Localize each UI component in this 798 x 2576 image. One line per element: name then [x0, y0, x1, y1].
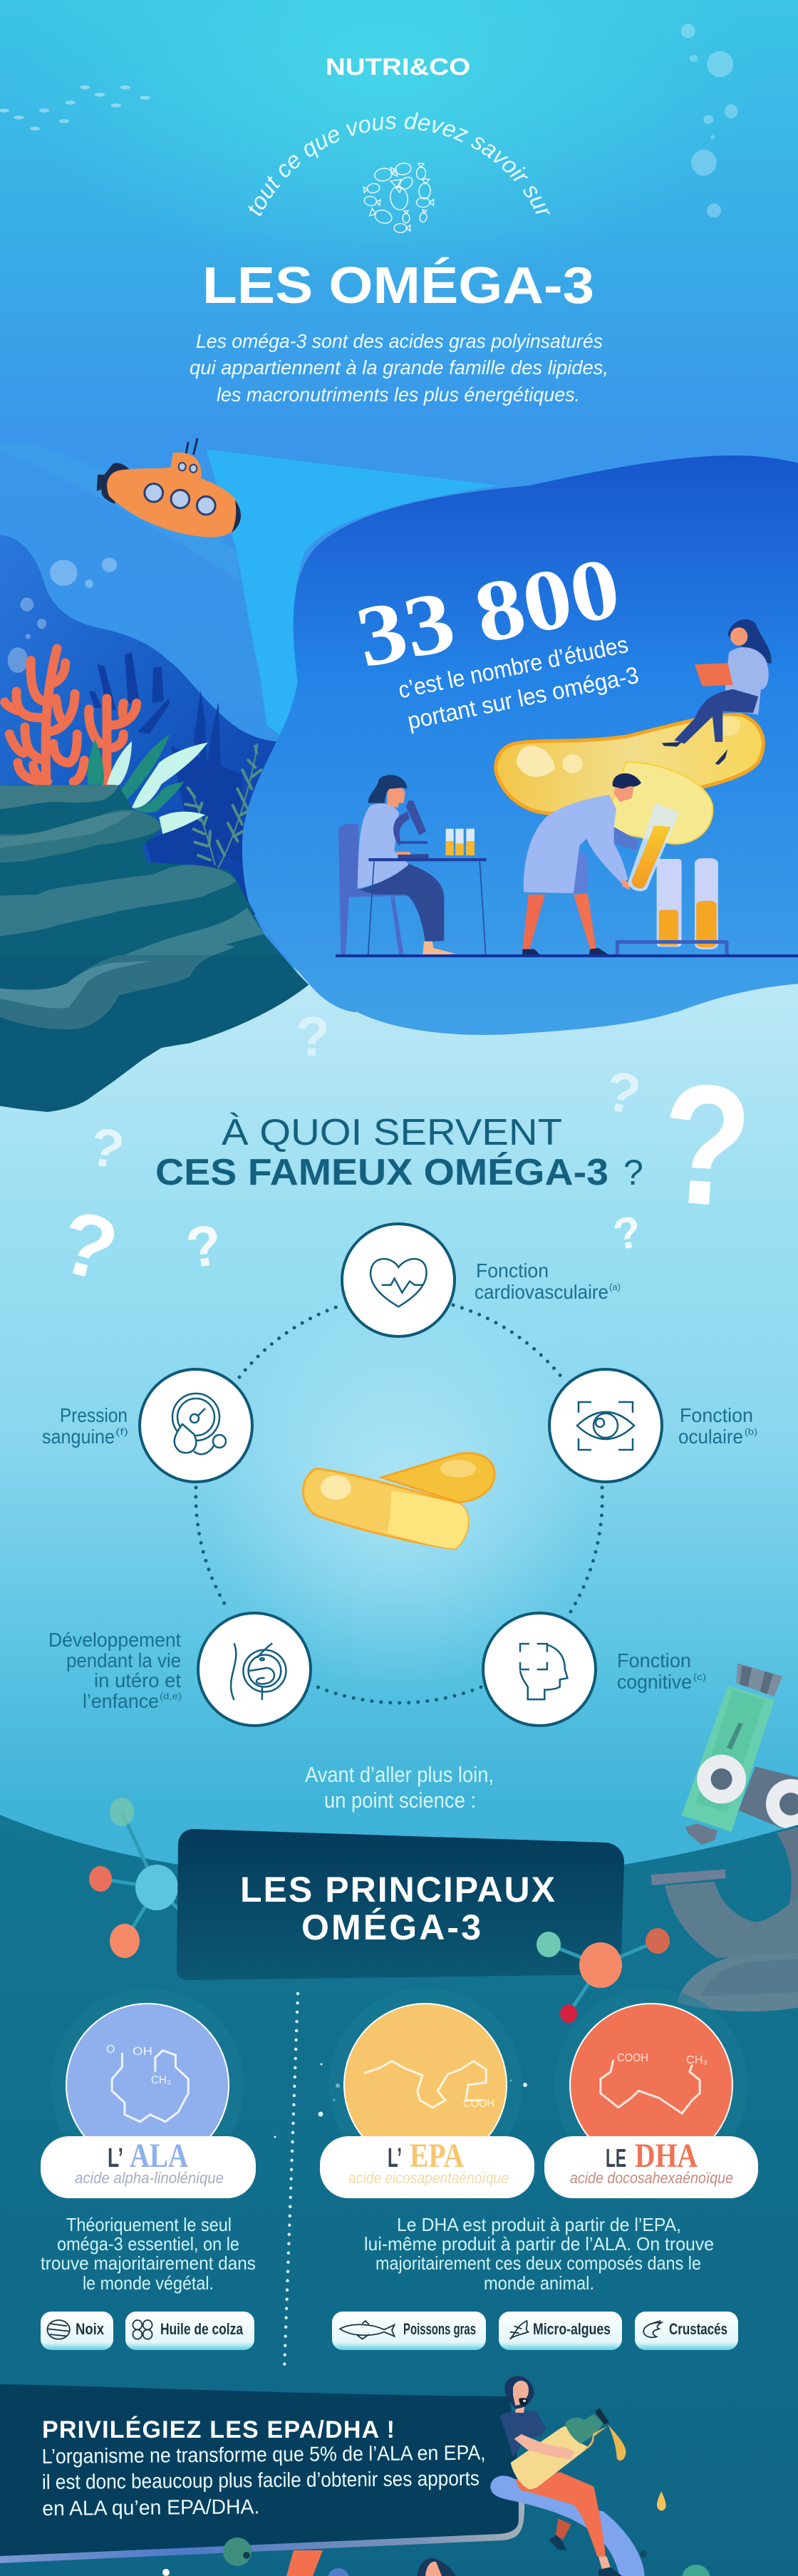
label — [617, 1649, 706, 1693]
label: (f) — [115, 1426, 128, 1437]
transition text — [305, 1762, 494, 1813]
heading: a quoi servent: À QUOI SERVENT — [222, 1112, 562, 1153]
chip: huile de colza: Huile de colza — [160, 2320, 244, 2338]
question marks: ? — [600, 1058, 646, 1127]
node: cardiovasculaire — [342, 1224, 621, 1336]
node: pression sanguine — [42, 1369, 252, 1482]
chemical structure ALA: O — [106, 2044, 115, 2056]
node: cognitive — [483, 1613, 706, 1726]
chemical structure EPA — [364, 2061, 494, 2110]
label: (b) — [745, 1426, 757, 1437]
icon: fish — [340, 2321, 395, 2339]
header light glow — [14, 0, 755, 285]
chip: micro-algues: Micro-algues — [533, 2320, 611, 2338]
chip: huile de colza — [125, 2312, 254, 2350]
icon: microscope upper — [682, 1663, 798, 1845]
pill text ALA: acide alpha-linolénique — [75, 2169, 224, 2187]
heading text — [240, 1870, 555, 1947]
pill text ALA: ALA — [130, 2137, 188, 2175]
pill text DHA: acide docosahexaénoïque — [570, 2169, 733, 2187]
text: EPA DHA description: Le DHA est produit à partir de l’EPA, — [397, 2214, 681, 2235]
pill ALA — [41, 2136, 256, 2198]
pill text DHA: LE — [606, 2143, 626, 2173]
label: sanguine — [42, 1426, 115, 1448]
bubbles — [8, 557, 117, 673]
sparkles — [274, 2063, 527, 2138]
label: Développement — [48, 1629, 181, 1651]
central capsule — [303, 1453, 494, 1549]
panel heading: PRIVILÉGIEZ LES EPA/DHA ! — [42, 2416, 395, 2443]
question marks: ? — [84, 1116, 129, 1182]
chemical structure DHA: COOH — [617, 2052, 648, 2064]
scientist on capsule — [662, 619, 772, 765]
pill DHA — [544, 2136, 758, 2198]
left molecule — [89, 1798, 196, 1958]
chip: noix — [41, 2312, 113, 2350]
intro paragraph — [190, 330, 608, 406]
label — [678, 1404, 757, 1448]
light band upper left — [0, 442, 239, 580]
rocks — [0, 785, 306, 984]
icon: colza flower — [133, 2320, 152, 2339]
lower rocks — [0, 955, 309, 1112]
person with oil bottle — [490, 2376, 645, 2576]
pill text ALA — [75, 2137, 224, 2187]
question marks — [49, 1005, 757, 1301]
intro paragraph: qui appartiennent à la grande famille des lipides, — [190, 356, 608, 378]
blob bottom — [356, 1011, 677, 1035]
stat: 33 800: 33 800 — [348, 539, 628, 686]
icon: pregnancy — [231, 1643, 286, 1700]
label: in utéro et — [94, 1669, 181, 1691]
label: (a) — [609, 1282, 621, 1292]
dark section dome — [0, 1815, 798, 2576]
node: developpement — [48, 1613, 311, 1726]
icon: submarine — [97, 438, 241, 537]
arc heading: tout ce que vous devez savoir sur — [248, 113, 550, 216]
scientist with test tube — [522, 773, 682, 955]
centre glow — [207, 1304, 591, 1689]
question marks: ? — [296, 1005, 330, 1068]
coral — [5, 649, 137, 783]
chemical structure ALA — [106, 2044, 188, 2122]
stat caption: c’est le nombre d’études — [396, 631, 631, 704]
stat caption: portant sur les oméga-3 — [405, 661, 641, 734]
chemical structure EPA: COOH — [463, 2098, 494, 2110]
label — [475, 1259, 621, 1303]
leaves — [87, 734, 208, 834]
green ferns — [185, 743, 261, 867]
chip: micro-algues — [499, 2312, 622, 2350]
text: ALA description: Théoriquement le seul — [66, 2214, 232, 2235]
bottom decorations — [162, 2491, 710, 2576]
pill text DHA — [570, 2137, 733, 2187]
question marks: ? — [655, 1047, 757, 1244]
chip: noix: Noix — [76, 2320, 105, 2338]
microscope lower — [651, 1827, 798, 2011]
title: LES OMÉGA-3 — [202, 257, 594, 314]
card: DHA — [544, 1988, 758, 2198]
text: ALA description: trouve majoritairement dans — [41, 2252, 256, 2274]
text: EPA DHA description: lui-même produit à partir de l’ALA. On trouve — [364, 2233, 714, 2255]
chemical structure DHA: CH₃ — [686, 2054, 708, 2066]
icon: shrimp — [643, 2321, 662, 2337]
panel text — [41, 2442, 486, 2520]
right test tube and rack — [616, 858, 727, 954]
node: oculaire — [549, 1369, 757, 1482]
light beam — [206, 449, 499, 738]
icon: fish ball — [363, 162, 433, 232]
chemical structure DHA — [601, 2052, 708, 2113]
label: Fonction — [476, 1259, 549, 1282]
question marks: ? — [49, 1191, 128, 1301]
transition text: Avant d’aller plus loin, — [305, 1762, 494, 1787]
chip: poissons gras: Poissons gras — [403, 2320, 476, 2338]
pill EPA — [320, 2136, 534, 2198]
green ball — [223, 2538, 252, 2566]
heading text: LES PRINCIPAUX — [240, 1870, 555, 1910]
dark seaweed — [89, 652, 247, 905]
chip: crustaces: Crustacés — [669, 2320, 727, 2338]
intro paragraph: Les oméga-3 sont des acides gras polyinsaturés — [196, 330, 603, 352]
label: Pression — [60, 1404, 128, 1426]
heading: a quoi servent — [155, 1112, 643, 1193]
label: cardiovasculaire — [475, 1281, 608, 1303]
label — [42, 1404, 128, 1448]
icon: bubbles top right — [681, 24, 738, 217]
heading box — [177, 1829, 624, 1980]
label: Fonction — [617, 1649, 691, 1671]
right molecule — [537, 1928, 670, 2023]
chemical structure ALA: OH — [133, 2046, 152, 2058]
pill text EPA — [348, 2137, 509, 2187]
heading: a quoi servent: ? — [623, 1153, 643, 1192]
logo: NUTRI&CO — [326, 53, 470, 80]
intro paragraph: les macronutriments les plus énergétiques. — [217, 383, 580, 406]
text: ALA description: oméga-3 essentiel, on le — [57, 2233, 239, 2255]
label: cognitive — [617, 1671, 692, 1693]
icon: blood pressure — [172, 1393, 226, 1454]
label: (d,e) — [160, 1691, 182, 1701]
question marks: ? — [610, 1207, 645, 1260]
transition text: un point science : — [324, 1788, 476, 1813]
capsules illustration — [496, 714, 763, 844]
chemical structure ALA: CH₃ — [151, 2074, 171, 2086]
pill text EPA: acide eicosapentaénoïque — [348, 2169, 509, 2187]
card: ALA — [41, 1988, 256, 2198]
label: (c) — [693, 1671, 706, 1682]
icon: heart — [370, 1259, 427, 1307]
stat: 33 800 — [348, 538, 641, 741]
panel text: en ALA qu’en EPA/DHA. — [42, 2495, 259, 2520]
heading text: OMÉGA-3 — [301, 1907, 481, 1947]
panel: ocean scene — [0, 438, 798, 1112]
dark blue mountain — [0, 535, 285, 915]
chip: crustaces — [635, 2312, 738, 2350]
pill text DHA: DHA — [635, 2137, 698, 2175]
dotted ring — [196, 1305, 602, 1703]
blue blob — [242, 455, 798, 1012]
question marks: ? — [182, 1212, 226, 1280]
panel text: L’organisme ne transforme que 5% de l’ALA en EPA, — [41, 2442, 486, 2468]
small molecule ball behind box — [184, 1912, 208, 1941]
text: EPA DHA description — [364, 2214, 714, 2294]
text: EPA DHA description: monde animal. — [484, 2272, 594, 2294]
pill text EPA: L’ — [388, 2143, 402, 2173]
icon: head — [520, 1644, 567, 1699]
scientist at microscope — [338, 775, 487, 956]
icon: walnut — [47, 2320, 70, 2339]
panel text: il est donc beaucoup plus facile d’obtenir ses apports — [42, 2468, 480, 2494]
ground line — [336, 954, 798, 957]
icon: oil drop — [657, 2491, 666, 2511]
label: l’enfance — [83, 1690, 159, 1712]
label: Fonction — [680, 1404, 753, 1426]
chip: poissons gras — [332, 2312, 486, 2350]
dotted divider — [284, 1994, 298, 2370]
icon: fish shoal dashes — [0, 86, 150, 130]
text: ALA description: le monde végétal. — [83, 2272, 214, 2294]
panel: privilegiez — [0, 2384, 524, 2563]
label: oculaire — [678, 1426, 743, 1448]
pill text ALA: L’ — [108, 2143, 123, 2173]
text: ALA description — [41, 2214, 256, 2294]
label — [48, 1629, 182, 1712]
icon: algae — [510, 2321, 528, 2339]
text: EPA DHA description: majoritairement ces deux composés dans le — [375, 2252, 701, 2274]
stat caption — [396, 630, 641, 735]
label: pendant la vie — [66, 1649, 181, 1671]
icon: eye — [577, 1402, 634, 1450]
pill text EPA: EPA — [410, 2137, 464, 2175]
heading: a quoi servent: CES FAMEUX OMÉGA-3 — [155, 1152, 608, 1193]
card: EPA — [320, 1988, 534, 2198]
